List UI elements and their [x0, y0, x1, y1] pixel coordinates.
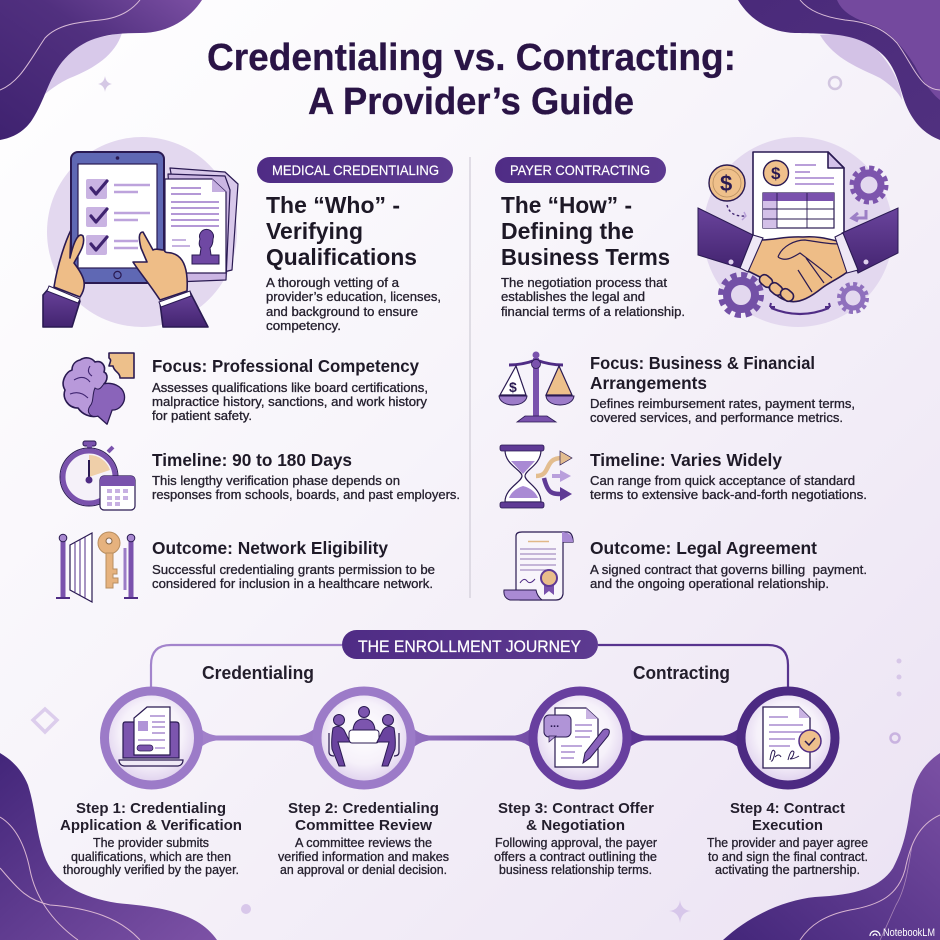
journey heading badge: THE ENROLLMENT JOURNEY [358, 637, 581, 656]
heading: the who: Verifying [266, 218, 363, 244]
bracket line: contracting side [598, 645, 788, 690]
text: outcome network eligibility: considered for inclusion in a healthcare network. [152, 577, 433, 591]
description: the how: establishes the legal and [501, 290, 645, 304]
decorative ring: top right [829, 77, 841, 89]
decorative dot [241, 904, 251, 914]
journey heading badge [342, 630, 598, 659]
badge: payer contracting [495, 157, 666, 183]
step 1 text [60, 800, 242, 877]
text: outcome network eligibility: Outcome: Network Eligibility [152, 538, 388, 558]
step 3 text: Step 3: Contract Offer [498, 800, 654, 817]
text: focus professional competency: Assesses qualifications like board certifications, [152, 381, 428, 395]
text: timeline varies widely [590, 450, 867, 502]
text: outcome network eligibility [152, 538, 435, 591]
icon: signed contract [763, 707, 821, 768]
corner decoration: bottom left [0, 753, 217, 940]
row: timeline 90 to 180 days [60, 441, 460, 510]
icon: scales [499, 352, 574, 422]
description: the who [266, 276, 441, 333]
text: timeline 90 to 180 days: Timeline: 90 to 180 Days [152, 450, 352, 470]
step 1 text: Application & Verification [60, 817, 242, 834]
heading: the how: Business Terms [501, 244, 670, 270]
heading: the who: The “Who” - [266, 192, 400, 218]
step 1 text: The provider submits [93, 836, 209, 850]
icon: contract scroll with seal [504, 532, 573, 600]
illustration: handshake with contract [698, 137, 898, 327]
step 4 text: The provider and payer agree [707, 836, 868, 850]
step 4 text: activating the partnership. [715, 863, 860, 877]
text: focus business and financial arrangements: Defines reimbursement rates, payment terms, [590, 397, 855, 411]
text: focus business and financial arrangements: Focus: Business & Financial [590, 353, 815, 373]
description: the how: The negotiation process that [501, 276, 668, 290]
step 3 node [533, 691, 627, 785]
step 1 text: Step 1: Credentialing [76, 800, 226, 817]
step 4 text [707, 800, 868, 877]
illustration: tablet checklist with hands [43, 137, 238, 327]
icon: hourglass and arrows [500, 445, 572, 508]
title: Credentialing vs. Contracting: [207, 37, 736, 79]
step 4 text: Execution [752, 817, 823, 834]
description: the who: provider’s education, licenses, [266, 290, 441, 304]
step 2 text: Committee Review [295, 817, 432, 834]
text: focus professional competency [152, 356, 428, 423]
text: outcome legal agreement: and the ongoing operational relationship. [590, 577, 829, 591]
text: outcome legal agreement: Outcome: Legal Agreement [590, 538, 817, 558]
decorative ring: right [890, 734, 900, 742]
text: focus professional competency: malpractice history, sanctions, and work history [152, 395, 428, 409]
step 2 text: Step 2: Credentialing [288, 800, 439, 817]
text: outcome legal agreement [590, 538, 867, 591]
badge: medical credentialing [257, 157, 453, 183]
row: outcome network eligibility [56, 532, 435, 602]
text: timeline 90 to 180 days: responses from schools, boards, and past employers. [152, 488, 460, 502]
title: A Provider’s Guide [308, 81, 634, 123]
step 2 node [317, 691, 411, 785]
icon: laptop with document [119, 707, 183, 766]
decorative dots: right [896, 658, 902, 696]
text: timeline 90 to 180 days [152, 450, 460, 502]
icon: committee at table [329, 706, 399, 766]
step 3 text: business relationship terms. [499, 863, 652, 877]
description: the who: and background to ensure [266, 305, 418, 319]
icon: contract negotiation: ... [550, 718, 559, 730]
description: the how [501, 276, 685, 319]
decorative sparkle: top left [98, 76, 112, 92]
corner decoration: bottom right [723, 753, 940, 940]
text: timeline varies widely: Can range from quick acceptance of standard [590, 474, 855, 488]
row: focus business and financial arrangements [499, 352, 855, 425]
badge: payer contracting: PAYER CONTRACTING [510, 162, 650, 178]
description: the how: financial terms of a relationship. [501, 305, 685, 319]
step 2 text: an approval or denial decision. [280, 863, 447, 877]
text: focus business and financial arrangements: covered services, and performance metrics. [590, 411, 843, 425]
panel: medical credentialing [257, 157, 453, 333]
text: timeline varies widely: terms to extensive back-and-forth negotiations. [590, 488, 867, 502]
row: focus professional competency [63, 353, 428, 424]
panel: contracting details [499, 352, 867, 600]
icon: brain and puzzle piece [63, 353, 134, 424]
title [207, 37, 736, 123]
corner decoration: top left [0, 0, 202, 140]
badge: medical credentialing: MEDICAL CREDENTIALING [272, 162, 439, 178]
step 3 text: & Negotiation [526, 817, 625, 834]
description: the who: A thorough vetting of a [266, 276, 399, 290]
step 4 node [741, 691, 835, 785]
heading: the who: Qualifications [266, 244, 417, 270]
heading: the how: Defining the [501, 218, 634, 244]
text: focus professional competency: for patient safety. [152, 409, 252, 423]
step 2 text [278, 800, 449, 877]
panel: the enrollment journey [60, 630, 868, 877]
illustration: handshake with contract: $ [771, 164, 781, 183]
step 1 node [104, 691, 198, 785]
heading: the how [501, 192, 670, 270]
step 3 text: offers a contract outlining the [494, 850, 657, 864]
row: timeline varies widely [500, 445, 867, 508]
bracket line: credentialing side [151, 645, 342, 690]
text: outcome legal agreement: A signed contract that governs billing payment. [590, 563, 867, 577]
panel: credentialing details [56, 353, 460, 602]
step 1 text: qualifications, which are then [71, 850, 231, 864]
decorative diamond [33, 709, 57, 732]
step 3 text [494, 800, 657, 877]
step 2 text: A committee reviews the [295, 836, 432, 850]
panel: payer contracting [495, 157, 685, 319]
icon: stopwatch and calendar [60, 441, 135, 510]
text: outcome network eligibility: Successful credentialing grants permission to be [152, 563, 435, 577]
decorative sparkle: bottom [669, 900, 691, 923]
text: timeline varies widely: Timeline: Varies Widely [590, 450, 782, 470]
text: focus professional competency: Focus: Professional Competency [152, 356, 419, 376]
label: credentialing: Credentialing [202, 663, 314, 683]
step 1 text: thoroughly verified by the payer. [63, 863, 239, 877]
heading: the who [266, 192, 417, 270]
step 3 text: Following approval, the payer [495, 836, 657, 850]
row: outcome legal agreement [504, 532, 867, 600]
corner decoration: top right [738, 0, 940, 140]
step 4 text: to and sign the final contract. [708, 850, 868, 864]
step 4 text: Step 4: Contract [730, 800, 845, 817]
text: focus business and financial arrangements: Arrangements [590, 373, 707, 393]
timeline connector [190, 720, 750, 756]
center divider [469, 157, 471, 598]
text: focus business and financial arrangements [590, 353, 855, 425]
icon: gate and key [56, 532, 138, 602]
icon: scales: $ [509, 379, 517, 395]
heading: the how: The “How” - [501, 192, 632, 218]
description: the who: competency. [266, 319, 341, 333]
step 2 text: verified information and makes [278, 850, 449, 864]
illustration: handshake with contract: $ [720, 171, 732, 196]
text: timeline 90 to 180 days: This lengthy verification phase depends on [152, 474, 400, 488]
label: contracting: Contracting [633, 663, 730, 683]
